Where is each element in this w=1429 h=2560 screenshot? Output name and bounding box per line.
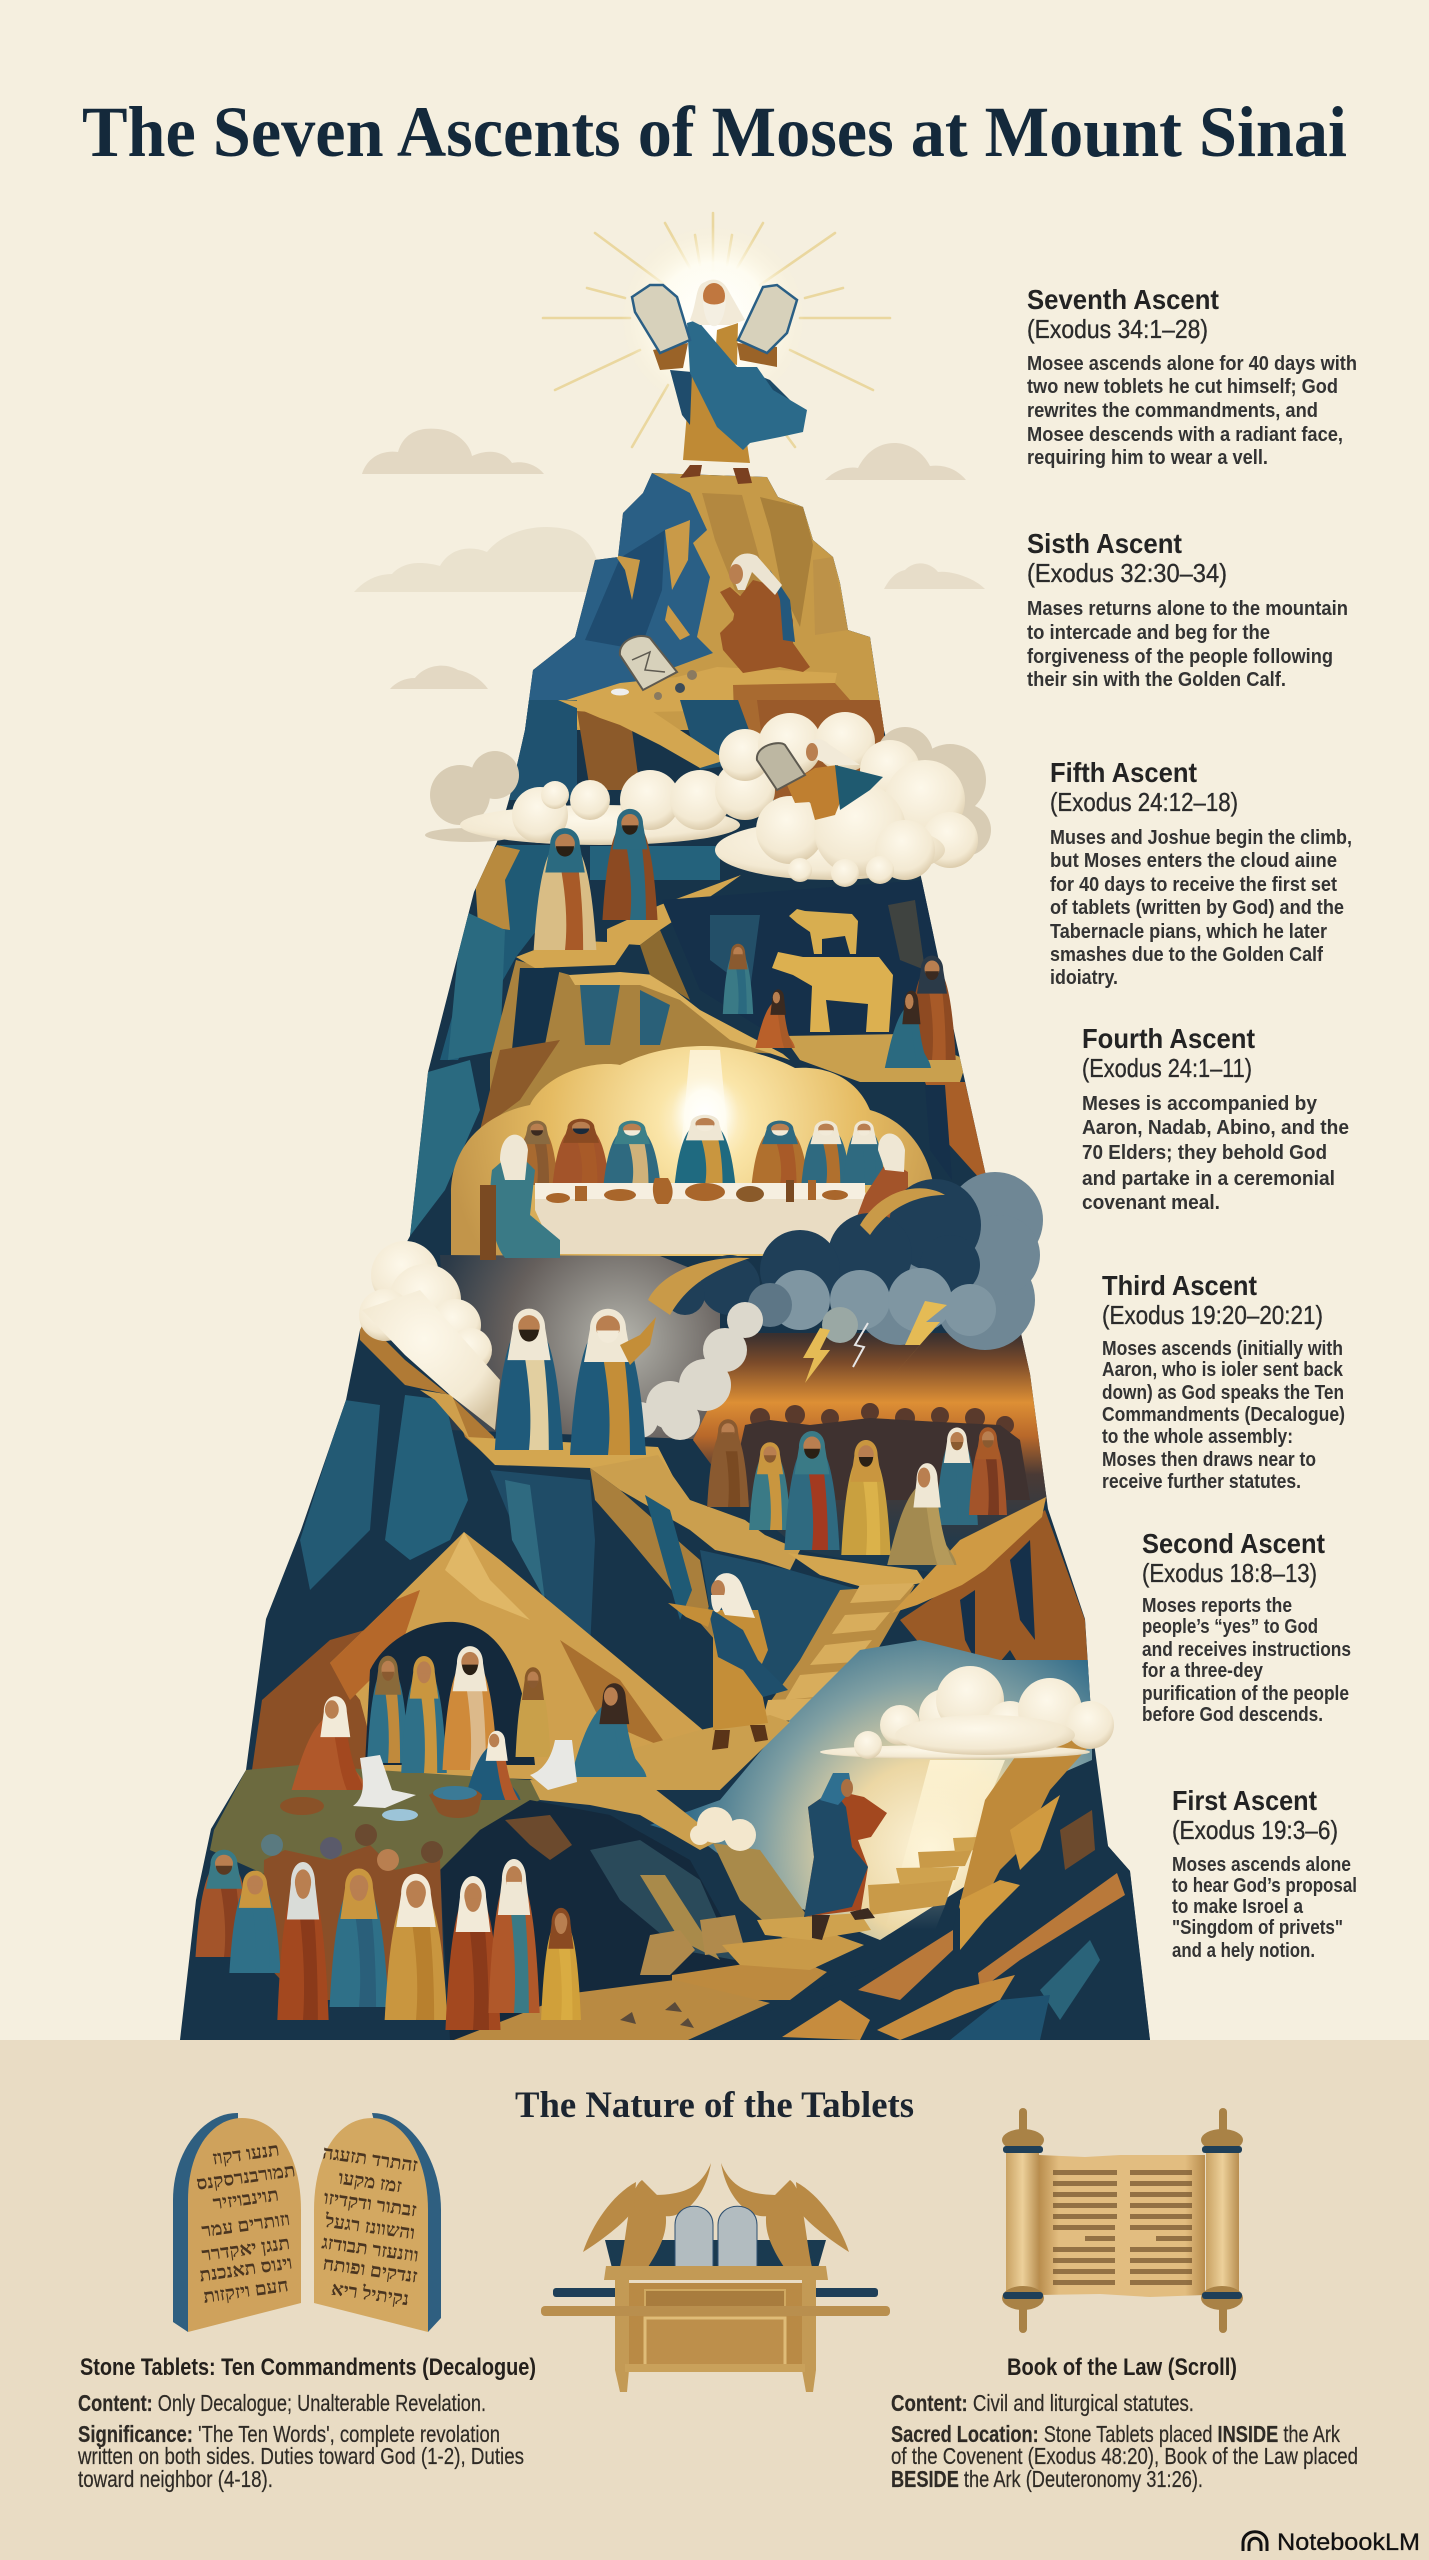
step labels: second ascent: purification of the people bbox=[1142, 1683, 1349, 1705]
step labels: sixth ascent: forgiveness of the people following bbox=[1027, 646, 1333, 668]
step labels: first ascent bbox=[1172, 1785, 1357, 1962]
step labels: fifth ascent: Tabernacle pians, which he later bbox=[1050, 921, 1327, 943]
icon: stone tablets: תנגן יאקדרר bbox=[201, 2233, 291, 2266]
icon: stone tablets: וינוס תאנכנת bbox=[198, 2253, 294, 2286]
stone tablets text block: Significance: 'The Ten Words', complete revolation bbox=[78, 2421, 500, 2447]
gold pole bbox=[541, 2306, 890, 2316]
step labels: seventh ascent: rewrites the commandments, and bbox=[1027, 400, 1318, 422]
step labels: seventh ascent: requiring him to wear a vell. bbox=[1027, 447, 1268, 469]
moses with tablets in cloud bbox=[757, 739, 883, 820]
step labels: first ascent: to hear God’s proposal bbox=[1172, 1875, 1357, 1897]
step labels: fifth ascent: smashes due to the Golden Calf bbox=[1050, 944, 1323, 966]
stone tablets text block: Content: Only Decalogue; Unalterable Revelation. bbox=[78, 2390, 486, 2416]
kneeling woman left bbox=[292, 1696, 368, 1790]
step labels: second ascent: for a three-dey bbox=[1142, 1660, 1264, 1682]
step labels: seventh ascent: Seventh Ascent bbox=[1027, 284, 1219, 315]
low cave hump bbox=[440, 1800, 808, 2040]
step labels: seventh ascent: Mosee ascends alone for 40 days with bbox=[1027, 353, 1357, 375]
step labels: third ascent: Moses ascends (initially with bbox=[1102, 1338, 1343, 1360]
middle cliff streaks bbox=[410, 845, 990, 1236]
light streaks bbox=[681, 1050, 729, 1148]
step labels: fourth ascent bbox=[1082, 1023, 1349, 1214]
step labels: fifth ascent: but Moses enters the cloud aiıne bbox=[1050, 850, 1337, 872]
second ascent moses bbox=[668, 1573, 788, 1750]
cloak bbox=[670, 370, 692, 425]
large calf bbox=[772, 952, 893, 1032]
stones bbox=[611, 670, 697, 700]
sixth ascent figure kneeling bbox=[611, 554, 810, 700]
light beams bbox=[908, 1760, 1005, 1922]
step labels: first ascent: to make Isroel a bbox=[1172, 1896, 1304, 1918]
raised arm bbox=[620, 1317, 656, 1365]
step labels: seventh ascent: two new toblets he cut himself; God bbox=[1027, 376, 1338, 398]
step labels: second ascent: and receives instructions bbox=[1142, 1639, 1351, 1661]
step labels: fourth ascent: covenant meal. bbox=[1082, 1192, 1220, 1214]
icon: stone tablets: זמז מקעו bbox=[337, 2168, 403, 2197]
feet bbox=[680, 465, 752, 484]
stone tablets text block: toward neighbor (4-18). bbox=[78, 2466, 273, 2492]
icon: stone tablets: זנדקים ופותח bbox=[321, 2253, 419, 2288]
fearful crowd bbox=[707, 1403, 1030, 1565]
step labels: fourth ascent: (Exodus 24:1–11) bbox=[1082, 1053, 1252, 1083]
step labels: third ascent: receive further statutes. bbox=[1102, 1471, 1301, 1493]
kneeling man right bbox=[571, 1683, 646, 1777]
crowd fire backdrop bbox=[693, 1333, 1047, 1550]
step labels: fifth ascent: of tablets (written by God) and the bbox=[1050, 897, 1344, 919]
halo bbox=[621, 226, 805, 410]
icon: stone tablets: זבתור ודקדיזו bbox=[322, 2188, 418, 2221]
step labels: fourth ascent: Fourth Ascent bbox=[1082, 1023, 1255, 1054]
first ascent moses bbox=[804, 1773, 887, 1940]
step labels: fourth ascent: 70 Elders; they behold God bbox=[1082, 1142, 1327, 1164]
storm clouds bbox=[648, 1172, 1043, 1383]
icon: stone tablets: זהתרד תזעגה bbox=[321, 2142, 419, 2177]
step labels: third ascent: Third Ascent bbox=[1102, 1270, 1257, 1301]
worshippers bbox=[723, 944, 753, 1014]
divine light bbox=[671, 1073, 739, 1157]
step labels: fourth ascent: and partake in a ceremonial bbox=[1082, 1168, 1335, 1190]
right foreground rocks bbox=[782, 1740, 1150, 2040]
step labels: second ascent: Moses reports the bbox=[1142, 1595, 1292, 1617]
background silhouettes bbox=[735, 1403, 1030, 1500]
mountain bbox=[170, 460, 1160, 2045]
first ascent stairs bbox=[672, 1837, 978, 2000]
rock base bbox=[170, 460, 1160, 2045]
cave hill bbox=[252, 1532, 703, 1780]
step labels: sixth ascent: (Exodus 32:30–34) bbox=[1027, 558, 1227, 588]
icon: stone tablets: וזותרים עמר bbox=[200, 2209, 291, 2242]
icon: stone tablets: והשוונז רגעל bbox=[323, 2211, 416, 2244]
covenant meal scene bbox=[480, 1073, 908, 1260]
step labels: seventh ascent: (Exodus 34:1–28) bbox=[1027, 314, 1208, 344]
title: The Seven Ascents of Moses at Mount Sinai bbox=[82, 92, 1347, 172]
step labels: sixth ascent: Mases returns alone to the mountain bbox=[1027, 598, 1348, 620]
step labels: sixth ascent: Sisth Ascent bbox=[1027, 528, 1182, 559]
step labels: fourth ascent: Meses is accompanied by bbox=[1082, 1093, 1318, 1115]
robe bbox=[683, 323, 750, 463]
step labels: second ascent: people’s “yes” to God bbox=[1142, 1616, 1318, 1638]
step labels: first ascent: First Ascent bbox=[1172, 1785, 1317, 1816]
icon: stone tablets: תוינבויזיר bbox=[212, 2184, 280, 2215]
step labels: second ascent: (Exodus 18:8–13) bbox=[1142, 1558, 1317, 1588]
step labels: fifth ascent: idoiatry. bbox=[1050, 967, 1118, 989]
step labels: third ascent: Aaron, who is ioler sent back bbox=[1102, 1359, 1344, 1381]
small valley cloud bbox=[690, 1807, 756, 1851]
second ascent cloud bbox=[820, 1666, 1114, 1759]
right tablet bbox=[738, 285, 797, 353]
scroll text block bbox=[891, 2354, 1358, 2492]
golden calf scene bbox=[723, 909, 956, 1068]
icon: stone tablets bbox=[173, 2113, 441, 2332]
step labels: sixth ascent bbox=[1027, 528, 1348, 691]
icon: stone tablets: תנעו דקוז bbox=[211, 2139, 281, 2170]
step labels: first ascent: (Exodus 19:3–6) bbox=[1172, 1815, 1338, 1845]
scroll text block: Sacred Location: Stone Tablets placed INSIDE the Ark bbox=[891, 2421, 1340, 2447]
basin bbox=[429, 1786, 482, 1818]
step labels: seventh ascent bbox=[1027, 284, 1357, 469]
icon: scroll of the law bbox=[1002, 2108, 1243, 2333]
gold path bbox=[530, 1715, 790, 1850]
step labels: sixth ascent: to intercade and beg for the bbox=[1027, 622, 1270, 644]
stone tablets text block: Stone Tablets: Ten Commandments (Decalogue) bbox=[80, 2354, 536, 2381]
panel: the nature of the tablets bbox=[0, 2040, 1429, 2560]
step labels: first ascent: and a hely notion. bbox=[1172, 1940, 1315, 1962]
table bbox=[535, 1185, 868, 1254]
purification scene bbox=[280, 1646, 646, 1821]
step labels: first ascent: "Singdom of privets" bbox=[1172, 1917, 1343, 1939]
icon: stone tablets: נקיתיל ריא bbox=[330, 2279, 410, 2310]
background people bbox=[261, 1824, 445, 2000]
scroll text block: Book of the Law (Scroll) bbox=[1007, 2354, 1237, 2381]
icon: ark of the covenant bbox=[541, 2163, 890, 2392]
background clouds bbox=[354, 429, 985, 689]
step labels: third ascent: (Exodus 19:20–20:21) bbox=[1102, 1300, 1323, 1330]
water cloth bbox=[353, 1740, 577, 1808]
third ascent white clouds bbox=[359, 1241, 763, 1440]
step labels: fourth ascent: Aaron, Nadab, Abino, and the bbox=[1082, 1117, 1349, 1139]
lightning bbox=[803, 1301, 947, 1383]
mini tablets bbox=[675, 2206, 713, 2267]
icon: stone tablets: חעם ויזקזות bbox=[202, 2275, 290, 2308]
step labels: fifth ascent: Muses and Joshue begin the climb, bbox=[1050, 827, 1352, 849]
sleeves bbox=[653, 343, 777, 370]
ark box bbox=[622, 2283, 808, 2368]
covenant meal glow bbox=[451, 1046, 935, 1256]
stairs to second ascent bbox=[762, 1583, 915, 1722]
seventh ascent figure bbox=[543, 213, 890, 484]
left tablet bbox=[632, 285, 690, 353]
foreground crowd bbox=[196, 1824, 581, 2030]
small calf bbox=[789, 909, 858, 954]
step labels: third ascent: Moses then draws near to bbox=[1102, 1449, 1316, 1471]
stone tablets text block bbox=[77, 2354, 536, 2492]
step labels: seventh ascent: Mosee descends with a radiant face, bbox=[1027, 424, 1343, 446]
rays bbox=[543, 213, 890, 447]
notebooklm mark: NotebookLM bbox=[1277, 2529, 1420, 2556]
seated elder right bbox=[850, 1160, 908, 1240]
third ascent smoke backdrop bbox=[440, 1255, 720, 1440]
step labels: fifth ascent: for 40 days to receive the first set bbox=[1050, 874, 1337, 896]
step labels: third ascent: to the whole assembly: bbox=[1102, 1426, 1293, 1448]
panel heading: The Nature of the Tablets bbox=[515, 2085, 914, 2126]
page background bbox=[0, 0, 1429, 2040]
step labels: third ascent: down) as God speaks the Ten bbox=[1102, 1382, 1344, 1404]
stone tablets text block: written on both sides. Duties toward God (1-2), Duties bbox=[77, 2443, 524, 2469]
right gold ridge bbox=[892, 1497, 1046, 1613]
step labels: second ascent: before God descends. bbox=[1142, 1704, 1323, 1726]
step labels: fifth ascent: Fifth Ascent bbox=[1050, 757, 1197, 788]
step labels: first ascent: Moses ascends alone bbox=[1172, 1854, 1351, 1876]
fifth ascent clouds bbox=[425, 712, 991, 887]
step labels: third ascent: Commandments (Decalogue) bbox=[1102, 1404, 1345, 1426]
icon: stone tablets: תמורבנרסקנס bbox=[195, 2160, 297, 2195]
olive ground bbox=[210, 1765, 540, 1874]
seated elder left bbox=[490, 1150, 560, 1258]
third ascent figures bbox=[495, 1309, 656, 1455]
step labels: fifth ascent: (Exodus 24:12–18) bbox=[1050, 787, 1238, 817]
step labels: second ascent bbox=[1142, 1528, 1351, 1726]
step labels: sixth ascent: their sin with the Golden Calf. bbox=[1027, 669, 1286, 691]
scroll text block: BESIDE the Ark (Deuteronomy 31:26). bbox=[891, 2466, 1203, 2492]
elders bbox=[516, 1121, 558, 1185]
sky opening bbox=[650, 1640, 1092, 1940]
kneeling woman centre bbox=[464, 1731, 520, 1800]
ark lid bbox=[604, 2266, 828, 2280]
head bbox=[690, 280, 745, 325]
step labels: fifth ascent bbox=[1050, 757, 1352, 989]
icon: stone tablets: ווזנעזר תבודזג bbox=[320, 2232, 420, 2267]
summit rock faces bbox=[500, 473, 884, 800]
bottom ground path bbox=[454, 1980, 770, 2040]
stone bbox=[280, 1797, 324, 1815]
step labels: third ascent bbox=[1102, 1270, 1345, 1493]
brown columns under right ridge bbox=[900, 1510, 1090, 1694]
step labels: second ascent: Second Ascent bbox=[1142, 1528, 1325, 1559]
third ascent cliffs bbox=[300, 1315, 925, 1715]
broken tablet bbox=[620, 636, 677, 690]
fifth ascent climbers bbox=[534, 809, 658, 950]
scroll text block: Content: Civil and liturgical statutes. bbox=[891, 2390, 1194, 2416]
cherubim bbox=[583, 2163, 849, 2267]
